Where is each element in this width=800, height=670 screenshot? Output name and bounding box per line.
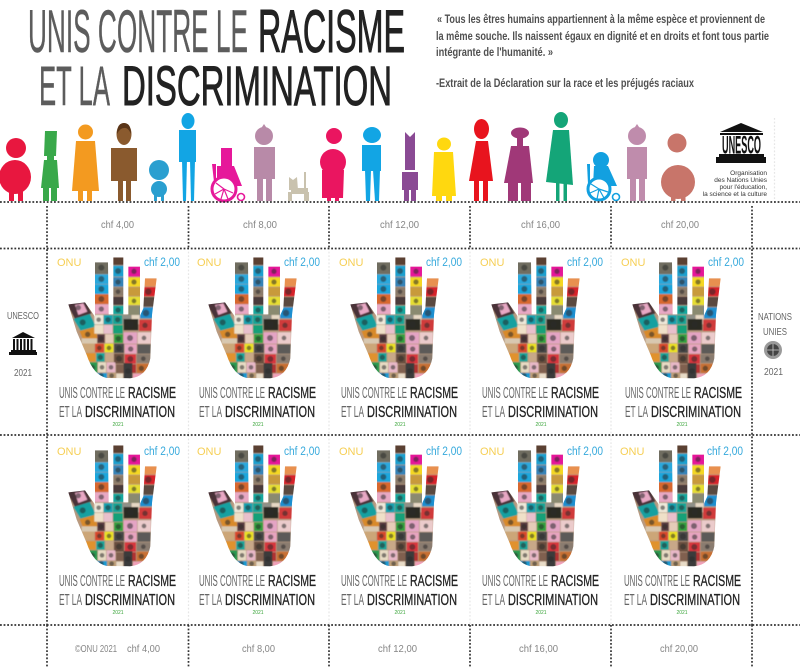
top margin prices: chf 20,00 — [661, 219, 699, 231]
stamp row 2, column 3: ET LA — [341, 592, 364, 609]
left margin: UNESCO — [7, 311, 39, 379]
stamp row 2, column 2: 2021 — [252, 610, 264, 616]
stamp row 1, column 5: 2021 — [676, 422, 688, 428]
quotation text: intégrante de l'humanité. » — [436, 47, 553, 59]
UNESCO logo top right: la science et la culture — [703, 191, 767, 198]
stamp row 2, column 4: DISCRIMINATION — [508, 592, 598, 609]
UNESCO logo top right: des Nations Unies — [714, 177, 768, 184]
top margin prices: chf 8,00 — [243, 219, 277, 231]
stamp row 1, column 1: ET LA — [59, 404, 82, 421]
stamp row 1, column 3: 2021 — [394, 422, 406, 428]
stamp row 2, column 5 — [620, 443, 743, 616]
bottom margin prices — [75, 643, 698, 655]
stamp row 1, column 4: DISCRIMINATION — [508, 404, 598, 421]
bottom margin prices: chf 16,00 — [519, 643, 558, 655]
stamp row 2, column 3: RACISME — [410, 573, 458, 590]
stamp row 1, column 3: DISCRIMINATION — [367, 404, 457, 421]
stamp row 1, column 4: 2021 — [535, 422, 547, 428]
stamp row 2, column 1: ET LA — [59, 592, 82, 609]
stamp row 2, column 1 — [57, 443, 180, 616]
stamp row 2, column 1: UNIS CONTRE LE — [59, 573, 125, 590]
figure: tall blue person — [179, 113, 196, 201]
stamp row 1, column 1: RACISME — [128, 385, 176, 402]
stamp row 2, column 4: ONU — [480, 446, 504, 458]
icon: cat — [288, 172, 309, 201]
UNESCO logo top right: Organisation — [730, 170, 767, 177]
right margin: Nations Unies — [758, 312, 792, 378]
stamp row 1, column 5: chf 2,00 — [708, 257, 744, 269]
stamp row 2, column 3: UNIS CONTRE LE — [341, 573, 407, 590]
stamp row 2, column 1: chf 2,00 — [144, 446, 180, 458]
stamp row 1, column 3: ONU — [339, 257, 364, 269]
stamp row 1, column 5: UNIS CONTRE LE — [625, 385, 691, 402]
figure: yellow person — [432, 138, 456, 201]
stamp row 2, column 1: RACISME — [128, 573, 176, 590]
title: UNIS CONTRE LE — [28, 0, 248, 65]
stamp row 2, column 4: RACISME — [551, 573, 599, 590]
stamp row 1, column 3: chf 2,00 — [426, 257, 462, 269]
figure: red person — [469, 119, 493, 201]
stamp row 2, column 4 — [480, 443, 603, 616]
stamp row 2, column 2: ET LA — [199, 592, 222, 609]
row of people figures — [0, 112, 695, 201]
stamp row 1, column 5: DISCRIMINATION — [651, 404, 741, 421]
stamp row 2, column 2: RACISME — [268, 573, 316, 590]
stamp row 2, column 4: chf 2,00 — [567, 446, 603, 458]
stamp row 2, column 5: ET LA — [624, 592, 647, 609]
stamp row 1, column 1: chf 2,00 — [144, 257, 180, 269]
stamp row 1, column 4 — [480, 255, 603, 428]
stamp row 2, column 1: ONU — [57, 446, 82, 458]
stamp row 1, column 2: ET LA — [199, 404, 222, 421]
stamp row 2, column 5: ONU — [620, 446, 644, 458]
figure: crimson person — [320, 128, 346, 201]
figure: red round person — [0, 138, 31, 201]
stamp row 1, column 3: UNIS CONTRE LE — [341, 385, 407, 402]
stamp row 2, column 2: ONU — [197, 446, 222, 458]
UNESCO logo top right: pour l'éducation, — [720, 184, 767, 191]
stamp row 1, column 4: RACISME — [551, 385, 599, 402]
stamp row 1, column 2: chf 2,00 — [284, 257, 320, 269]
stamp row 2, column 5: 2021 — [676, 610, 688, 616]
stamp row 1, column 4: UNIS CONTRE LE — [482, 385, 548, 402]
stamp row 1, column 3: ET LA — [341, 404, 364, 421]
stamp row 2, column 4: ET LA — [482, 592, 505, 609]
stamp row 2, column 2 — [197, 443, 320, 616]
stamp row 1, column 4: ONU — [480, 257, 504, 269]
figure: green person — [41, 131, 59, 201]
stamp row 2, column 1: 2021 — [112, 610, 124, 616]
stamp row 2, column 1: DISCRIMINATION — [85, 592, 175, 609]
figure: blue wheelchair user — [587, 152, 620, 200]
UNESCO logo top right — [703, 123, 768, 198]
figure: purple person — [402, 132, 418, 201]
stamp row 2, column 2: chf 2,00 — [284, 446, 320, 458]
stamp row 2, column 3: DISCRIMINATION — [367, 592, 457, 609]
figure: orange person — [72, 124, 99, 201]
top margin prices: chf 12,00 — [380, 219, 419, 231]
bottom margin prices: chf 20,00 — [660, 643, 698, 655]
bottom margin prices: ©ONU 2021 — [75, 643, 117, 655]
stamp row 1, column 2: 2021 — [252, 422, 264, 428]
stamp row 1, column 4: chf 2,00 — [567, 257, 603, 269]
figure: salmon round person — [661, 134, 695, 201]
left margin: UNESCO: UNESCO — [7, 311, 39, 322]
stamp row 1, column 5: ET LA — [625, 404, 648, 421]
stamp row 2, column 4: UNIS CONTRE LE — [482, 573, 548, 590]
stamp row 1, column 1: UNIS CONTRE LE — [59, 385, 125, 402]
right margin: Nations Unies: 2021 — [764, 367, 783, 378]
stamp row 1, column 3 — [339, 255, 462, 428]
stamp row 1, column 2: ONU — [197, 257, 222, 269]
stamp row 2, column 5: UNIS CONTRE LE — [624, 573, 690, 590]
stamp row 2, column 3: ONU — [339, 446, 364, 458]
left margin: UNESCO: 2021 — [14, 368, 32, 379]
stamp row 2, column 5: chf 2,00 — [707, 446, 743, 458]
stamp row 2, column 2: DISCRIMINATION — [225, 592, 315, 609]
quotation text — [436, 14, 769, 90]
stamp row 1, column 3: RACISME — [410, 385, 458, 402]
stamp row 1, column 2: DISCRIMINATION — [225, 404, 315, 421]
quotation text: -Extrait de la Déclaration sur la race et les préjugés raciaux — [436, 78, 694, 90]
figure: blue person — [362, 127, 381, 201]
stamp row 1, column 5: RACISME — [694, 385, 742, 402]
title: RACISME — [258, 0, 405, 65]
right margin: Nations Unies: UNIES — [763, 327, 787, 338]
top margin prices: chf 4,00 — [101, 219, 134, 231]
stamp row 1, column 2: RACISME — [268, 385, 316, 402]
top margin prices: chf 16,00 — [521, 219, 560, 231]
bottom margin prices: chf 8,00 — [242, 643, 275, 655]
stamp row 1, column 1 — [57, 255, 180, 428]
figure: mauve person — [254, 124, 275, 201]
stamp row 1, column 2 — [197, 255, 320, 428]
title: DISCRIMINATION — [122, 54, 392, 117]
stamp row 1, column 1: 2021 — [112, 422, 124, 428]
figure: plum person — [504, 128, 533, 201]
stamp row 1, column 2: UNIS CONTRE LE — [199, 385, 265, 402]
top margin prices — [101, 219, 699, 231]
bottom margin prices: chf 12,00 — [378, 643, 417, 655]
stamp row 2, column 5: RACISME — [693, 573, 741, 590]
title — [28, 0, 405, 117]
stamp row 1, column 4: ET LA — [482, 404, 505, 421]
figure: small blue child — [149, 160, 169, 201]
figure: green tall person — [546, 112, 573, 201]
figure: pink wheelchair user — [212, 148, 244, 201]
stamp row 2, column 4: 2021 — [535, 610, 547, 616]
stamp row 2, column 5: DISCRIMINATION — [650, 592, 740, 609]
stamp row 2, column 3 — [339, 443, 462, 616]
title: ET LA — [39, 54, 110, 117]
stamp row 2, column 2: UNIS CONTRE LE — [199, 573, 265, 590]
stamp row 2, column 3: 2021 — [394, 610, 406, 616]
figure: brown person — [111, 123, 137, 201]
stamp row 1, column 1: DISCRIMINATION — [85, 404, 175, 421]
stamp row 1, column 1: ONU — [57, 257, 82, 269]
stamp row 2, column 3: chf 2,00 — [426, 446, 462, 458]
stamp row 1, column 5 — [621, 255, 744, 428]
bottom margin prices: chf 4,00 — [127, 643, 160, 655]
figure: mauve person right — [627, 124, 647, 201]
stamp row 1, column 5: ONU — [621, 257, 646, 269]
